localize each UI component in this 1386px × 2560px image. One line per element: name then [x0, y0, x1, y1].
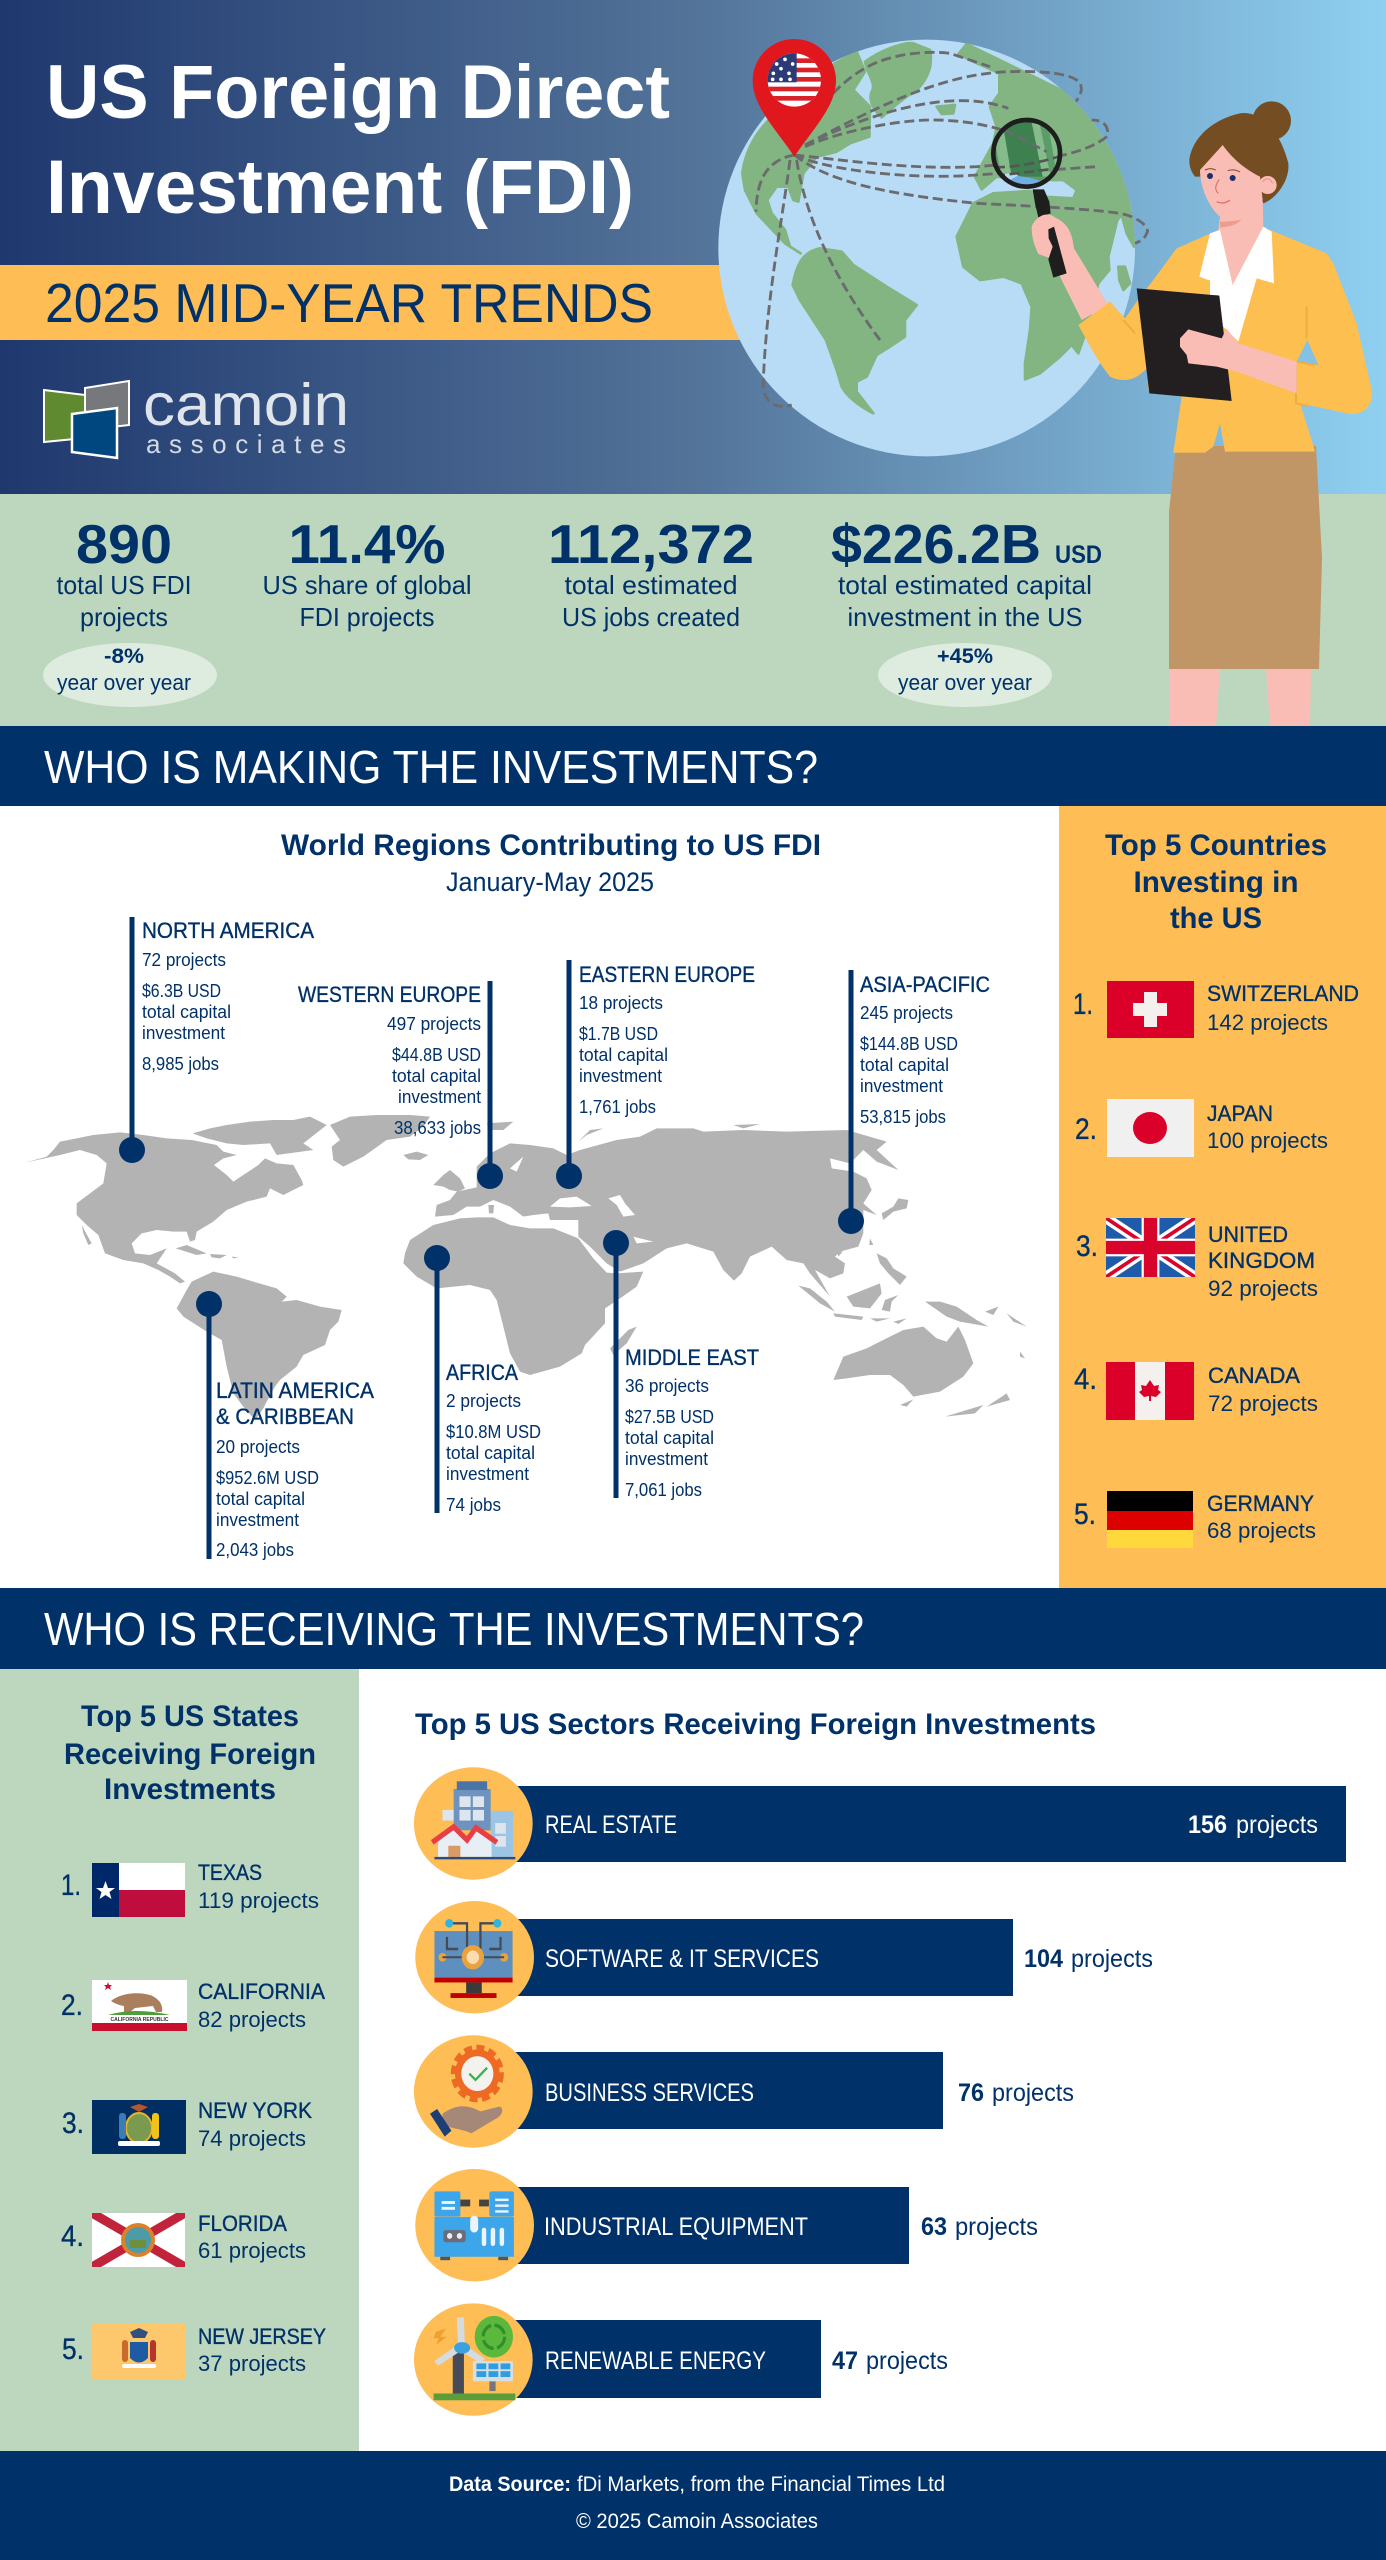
- stat: capital investment: [831, 513, 1102, 707]
- section heading: who is making: WHO IS MAKING THE INVESTMENTS?: [44, 741, 818, 793]
- region: Middle East: 7,061 jobs: [625, 1480, 702, 1500]
- region: Western Europe: $44.8B USD: [392, 1045, 481, 1065]
- jacket: [1078, 230, 1372, 453]
- country 1: Switzerland: SWITZERLAND: [1207, 981, 1359, 1006]
- icon: industrial equipment: [415, 2169, 534, 2282]
- stat: jobs: 112,372: [548, 513, 754, 575]
- state 3: New York: [62, 2098, 312, 2154]
- icon: magnifying glass: [993, 117, 1063, 217]
- countries heading: Top 5 Countries: [1105, 829, 1327, 862]
- region: Middle East: investment: [625, 1449, 708, 1469]
- bar: industrial equipment: INDUSTRIAL EQUIPMENT: [544, 2213, 808, 2241]
- region: Western Europe: [298, 981, 503, 1189]
- country 3: United Kingdom: KINGDOM: [1208, 1248, 1315, 1273]
- shirt: [1199, 227, 1274, 342]
- stat: FDI projects: year over year: [57, 670, 191, 695]
- panel: top 5 countries: [1059, 806, 1386, 1588]
- legs: [1169, 669, 1311, 726]
- country 2: Japan: 100 projects: [1207, 1128, 1328, 1153]
- stat: capital investment: $226.2B: [831, 513, 1041, 575]
- neck: [1218, 200, 1263, 285]
- region: Asia-Pacific: investment: [860, 1076, 943, 1096]
- bar: industrial equipment: [510, 2187, 1038, 2264]
- hand on tablet: [1180, 328, 1297, 393]
- region: Eastern Europe: investment: [579, 1066, 662, 1086]
- tablet: [1137, 288, 1232, 401]
- country 1: Switzerland: [1073, 981, 1359, 1038]
- bar: renewable energy: RENEWABLE ENERGY: [545, 2347, 766, 2375]
- stat: jobs: [548, 513, 754, 632]
- region: Eastern Europe: 1,761 jobs: [579, 1097, 656, 1117]
- dashed investment routes: [756, 52, 1147, 406]
- region: Latin America and Caribbean: $952.6M USD: [216, 1468, 319, 1488]
- state 4: Florida: 4.: [61, 2220, 84, 2253]
- states heading: Receiving Foreign: [64, 1738, 316, 1771]
- region: Africa: $10.8M USD: [446, 1422, 541, 1442]
- region: Latin America and Caribbean: 2,043 jobs: [216, 1540, 294, 1560]
- state 1: Texas: TEXAS: [198, 1860, 262, 1885]
- state 5: New Jersey: NEW JERSEY: [198, 2324, 326, 2349]
- subtitle band: [0, 265, 800, 340]
- state 1: Texas: 119 projects: [198, 1888, 319, 1913]
- bar: business services: [510, 2052, 1074, 2129]
- header banner: [0, 0, 1386, 494]
- region: Western Europe: investment: [398, 1087, 481, 1107]
- region: Latin America and Caribbean: & CARIBBEAN: [216, 1404, 354, 1429]
- country 5: Germany: 68 projects: [1207, 1518, 1316, 1543]
- state 3: New York: 3.: [62, 2107, 84, 2140]
- state 2: California: CALIFORNIA: [198, 1979, 325, 2004]
- countries heading: Investing in: [1134, 866, 1298, 899]
- region: Middle East: 36 projects: [625, 1376, 709, 1396]
- state 3: New York: 74 projects: [198, 2126, 306, 2151]
- state 2: California: 82 projects: [198, 2007, 306, 2032]
- footer: data source: [0, 2451, 1386, 2560]
- state 4: Florida: FLORIDA: [198, 2211, 287, 2236]
- head: [1189, 101, 1291, 220]
- panel: top 5 states: [0, 1669, 359, 2451]
- country 4: Canada: 72 projects: [1208, 1391, 1318, 1416]
- bar: real estate: projects: [1236, 1811, 1318, 1839]
- stat: US share: US share of global: [262, 570, 472, 600]
- region: Eastern Europe: $1.7B USD: [579, 1024, 658, 1044]
- state 5: New Jersey: [62, 2324, 326, 2379]
- region: Asia-Pacific: [838, 970, 990, 1234]
- state 2: California: CALIFORNIA REPUBLIC: [110, 2017, 169, 2023]
- bar: business services: projects: [992, 2079, 1074, 2107]
- section heading: who is receiving: [0, 1588, 1386, 1669]
- panel: top 5 sectors: [414, 1708, 1346, 2416]
- title: [46, 50, 670, 230]
- bar: renewable energy: 47: [832, 2347, 858, 2375]
- icon: real estate: [414, 1767, 533, 1880]
- country 4: Canada: CANADA: [1208, 1363, 1300, 1388]
- region: Latin America and Caribbean: [196, 1291, 374, 1560]
- bar: real estate: [510, 1786, 1346, 1862]
- state 3: New York: NEW YORK: [198, 2098, 312, 2123]
- panel: world regions: [25, 829, 1027, 1560]
- stat: jobs: US jobs created: [562, 602, 740, 632]
- icon: location pin with US flag: [753, 39, 836, 157]
- country 5: Germany: GERMANY: [1207, 1491, 1314, 1516]
- region: Africa: [424, 1245, 541, 1515]
- icon: business services: [414, 2035, 533, 2148]
- state 2: California: [61, 1979, 325, 2032]
- country 3: United Kingdom: UNITED: [1208, 1222, 1288, 1247]
- title: US Foreign Direct: [46, 50, 670, 135]
- region: Western Europe: WESTERN EUROPE: [298, 982, 481, 1007]
- region: Latin America and Caribbean: LATIN AMERICA: [216, 1378, 374, 1403]
- bar: renewable energy: [510, 2320, 948, 2398]
- country 1: Switzerland: 142 projects: [1207, 1010, 1328, 1035]
- region: Western Europe: 38,633 jobs: [394, 1118, 481, 1138]
- region: Asia-Pacific: 245 projects: [860, 1003, 953, 1023]
- country 2: Japan: JAPAN: [1207, 1101, 1273, 1126]
- world map: [25, 1115, 1027, 1420]
- bar: business services: 76: [958, 2079, 984, 2107]
- map title: January-May 2025: [446, 867, 654, 897]
- country 5: Germany: [1074, 1491, 1316, 1548]
- bar: software and IT services: projects: [1071, 1945, 1153, 1973]
- region: North America: 72 projects: [142, 950, 226, 970]
- region: Eastern Europe: EASTERN EUROPE: [579, 962, 755, 987]
- region: Eastern Europe: 18 projects: [579, 993, 663, 1013]
- region: Middle East: MIDDLE EAST: [625, 1345, 759, 1370]
- stat: capital investment: investment in the US: [848, 602, 1082, 632]
- region: Asia-Pacific: ASIA-PACIFIC: [860, 972, 990, 997]
- country 3: United Kingdom: [1076, 1218, 1318, 1301]
- bar: business services: BUSINESS SERVICES: [545, 2079, 754, 2107]
- states heading: Investments: [104, 1773, 276, 1806]
- icon: renewable energy: [414, 2303, 533, 2416]
- sector icons: [414, 1767, 534, 2416]
- stat: jobs: total estimated: [564, 570, 738, 600]
- region: Latin America and Caribbean: 20 projects: [216, 1437, 300, 1457]
- bar: industrial equipment: projects: [955, 2213, 1038, 2241]
- state 2: California: 2.: [61, 1989, 83, 2022]
- countries heading: the US: [1170, 902, 1262, 935]
- region: Middle East: total capital: [625, 1428, 714, 1448]
- key statistics panel: [0, 494, 1386, 726]
- country 4: Canada: 4.: [1074, 1363, 1097, 1396]
- section heading: who is making: [0, 726, 1386, 806]
- stat: FDI projects: [43, 513, 217, 707]
- stat: capital investment: +45%: [937, 645, 993, 668]
- region: Middle East: $27.5B USD: [625, 1407, 714, 1427]
- logo: camoin associates: [44, 372, 349, 459]
- country 3: United Kingdom: 92 projects: [1208, 1276, 1318, 1301]
- state 4: Florida: [61, 2211, 306, 2267]
- stat: US share: 11.4%: [288, 513, 446, 575]
- country 1: Switzerland: 1.: [1073, 988, 1093, 1021]
- region: Western Europe: total capital: [392, 1066, 481, 1086]
- region: North America: $6.3B USD: [142, 981, 221, 1001]
- footer: data source: fDi Markets, from the Financial Times Ltd: [577, 2473, 945, 2496]
- illustration: woman with tablet: [1078, 101, 1372, 726]
- region: Eastern Europe: total capital: [579, 1045, 668, 1065]
- stat: FDI projects: 890: [76, 513, 172, 575]
- bar: renewable energy: projects: [866, 2347, 948, 2375]
- countries heading: [1105, 829, 1327, 935]
- region: North America: 8,985 jobs: [142, 1054, 219, 1074]
- stat: US share: [262, 513, 472, 632]
- region: Latin America and Caribbean: investment: [216, 1510, 299, 1530]
- footer: data source: © 2025 Camoin Associates: [576, 2510, 818, 2533]
- region: Asia-Pacific: 53,815 jobs: [860, 1107, 946, 1127]
- icon: software and IT: [415, 1901, 534, 2013]
- region: North America: [119, 917, 314, 1163]
- region: Middle East: [603, 1230, 759, 1500]
- state 5: New Jersey: 37 projects: [198, 2351, 306, 2376]
- states heading: Top 5 US States: [81, 1700, 299, 1733]
- footer: data source: Data Source:: [449, 2473, 571, 2496]
- bar: software and IT services: [510, 1919, 1153, 1996]
- arm and hand holding magnifier: [1032, 215, 1108, 320]
- skirt: [1169, 446, 1322, 669]
- region: North America: NORTH AMERICA: [142, 918, 314, 943]
- section heading: who is receiving: WHO IS RECEIVING THE INVESTMENTS?: [44, 1603, 864, 1655]
- logo: camoin associates: associates: [146, 429, 346, 459]
- region: Africa: investment: [446, 1464, 529, 1484]
- stat: capital investment: total estimated capital: [838, 570, 1092, 600]
- region: Africa: AFRICA: [446, 1360, 518, 1385]
- country 2: Japan: 2.: [1075, 1113, 1097, 1146]
- country 3: United Kingdom: 3.: [1076, 1230, 1098, 1263]
- region: Asia-Pacific: $144.8B USD: [860, 1034, 958, 1054]
- map title: World Regions Contributing to US FDI: [281, 829, 821, 862]
- country 4: Canada: [1074, 1362, 1318, 1420]
- states heading: [64, 1700, 316, 1806]
- bar: software and IT services: 104: [1024, 1945, 1063, 1973]
- country 5: Germany: 5.: [1074, 1498, 1096, 1531]
- region: Latin America and Caribbean: total capital: [216, 1489, 305, 1509]
- state 1: Texas: [61, 1860, 319, 1917]
- map title: [281, 829, 821, 897]
- globe illustration: [718, 39, 1147, 456]
- region: North America: total capital: [142, 1002, 231, 1022]
- region: Eastern Europe: [556, 960, 755, 1189]
- state 5: New Jersey: 5.: [62, 2333, 84, 2366]
- region: North America: investment: [142, 1023, 225, 1043]
- region: Africa: 2 projects: [446, 1391, 521, 1411]
- stat: FDI projects: -8%: [104, 645, 144, 668]
- state 4: Florida: 61 projects: [198, 2238, 306, 2263]
- title: Investment (FDI): [46, 145, 634, 230]
- country 2: Japan: [1075, 1099, 1328, 1157]
- subtitle band: 2025 MID-YEAR TRENDS: [45, 272, 653, 334]
- region: Western Europe: 497 projects: [387, 1014, 481, 1034]
- region: Africa: total capital: [446, 1443, 535, 1463]
- logo: camoin associates: camoin: [143, 372, 349, 438]
- region: Asia-Pacific: total capital: [860, 1055, 949, 1075]
- stat: capital investment: USD: [1055, 541, 1102, 569]
- stat: US share: FDI projects: [300, 602, 434, 632]
- bar: real estate: 156: [1188, 1811, 1227, 1839]
- state 1: Texas: 1.: [61, 1869, 81, 1902]
- bar: real estate: REAL ESTATE: [545, 1811, 677, 1839]
- stat: capital investment: year over year: [898, 670, 1032, 695]
- stat: FDI projects: total US FDI: [56, 570, 192, 600]
- region: Africa: 74 jobs: [446, 1495, 501, 1515]
- bar: software and IT services: SOFTWARE & IT SERVICES: [545, 1945, 819, 1973]
- bar: industrial equipment: 63: [921, 2213, 947, 2241]
- stat: FDI projects: projects: [80, 602, 168, 632]
- sectors heading: Top 5 US Sectors Receiving Foreign Investments: [415, 1708, 1096, 1741]
